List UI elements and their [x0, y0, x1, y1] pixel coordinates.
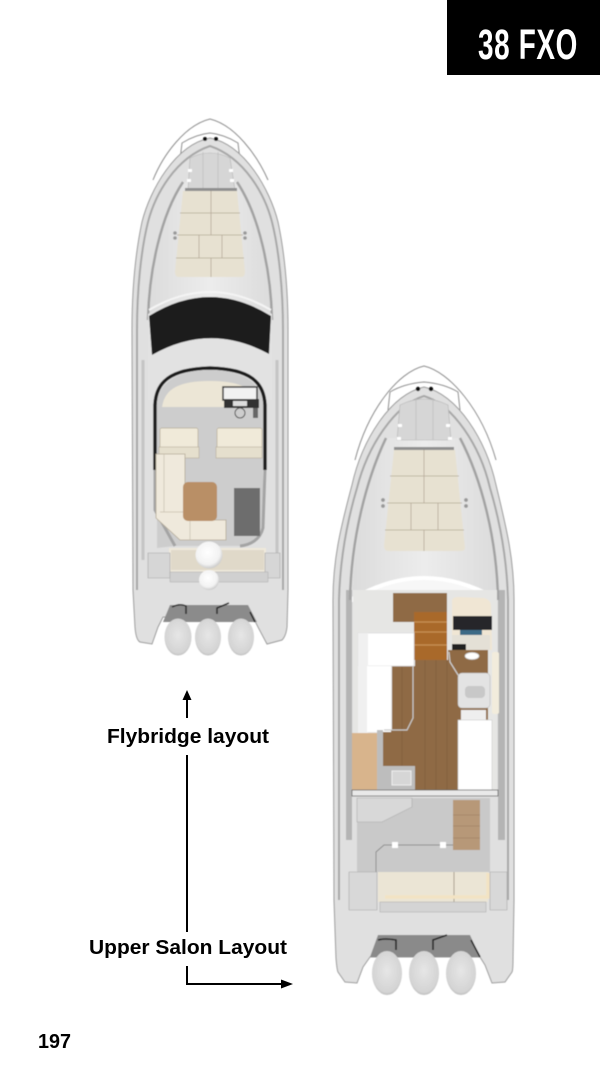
teak table — [183, 482, 217, 521]
salon floor — [353, 590, 497, 793]
forward sunpad — [173, 191, 247, 277]
radar domes — [196, 542, 222, 590]
arrow line to upper salon — [186, 755, 188, 932]
helm seats — [159, 428, 262, 458]
helm console — [449, 597, 492, 678]
windshield arc — [354, 578, 495, 600]
grey hatch — [234, 488, 260, 536]
cockpit furniture edge — [357, 798, 412, 822]
label: flybridge layout: Flybridge layout — [107, 726, 269, 748]
starboard cream strip — [492, 652, 499, 714]
L-shaped white sofa — [358, 633, 414, 733]
upper salon layout boat plan — [333, 366, 514, 995]
L-shaped settee — [156, 454, 226, 540]
engine well — [370, 935, 480, 957]
salon stairs — [414, 612, 447, 660]
anchor locker — [394, 387, 454, 451]
outboard engines — [164, 618, 254, 656]
arrow to flybridge — [182, 690, 192, 718]
helm station — [223, 387, 259, 418]
light wood cabinet — [352, 733, 377, 790]
foredeck — [149, 182, 271, 400]
hull — [333, 387, 514, 983]
label: upper salon layout: Upper Salon Layout — [89, 937, 287, 959]
aft bench — [148, 549, 280, 582]
flybridge cockpit — [155, 368, 265, 548]
teak flooring — [383, 593, 488, 790]
forward sunpad — [381, 450, 468, 551]
hardtop windshield — [148, 292, 272, 400]
white bench — [458, 720, 492, 790]
hatch outline — [376, 842, 453, 872]
anchor locker — [185, 137, 237, 192]
outboard engines — [372, 951, 476, 995]
aft bulkhead — [352, 790, 498, 796]
cockpit stairs — [453, 800, 480, 850]
aft cockpit floor — [357, 798, 490, 872]
engine well — [163, 603, 257, 622]
model title badge — [447, 0, 600, 75]
aft bench — [378, 872, 488, 912]
helm seat — [458, 673, 490, 720]
hull — [132, 138, 288, 644]
foredeck — [353, 438, 496, 640]
arrow to upper salon — [187, 966, 293, 988]
bow rail — [153, 119, 268, 180]
page number: 197 — [38, 1031, 71, 1053]
bow rail — [355, 366, 496, 460]
side boxes — [349, 872, 507, 910]
flybridge layout boat plan — [132, 119, 288, 656]
galley sink — [377, 730, 415, 790]
